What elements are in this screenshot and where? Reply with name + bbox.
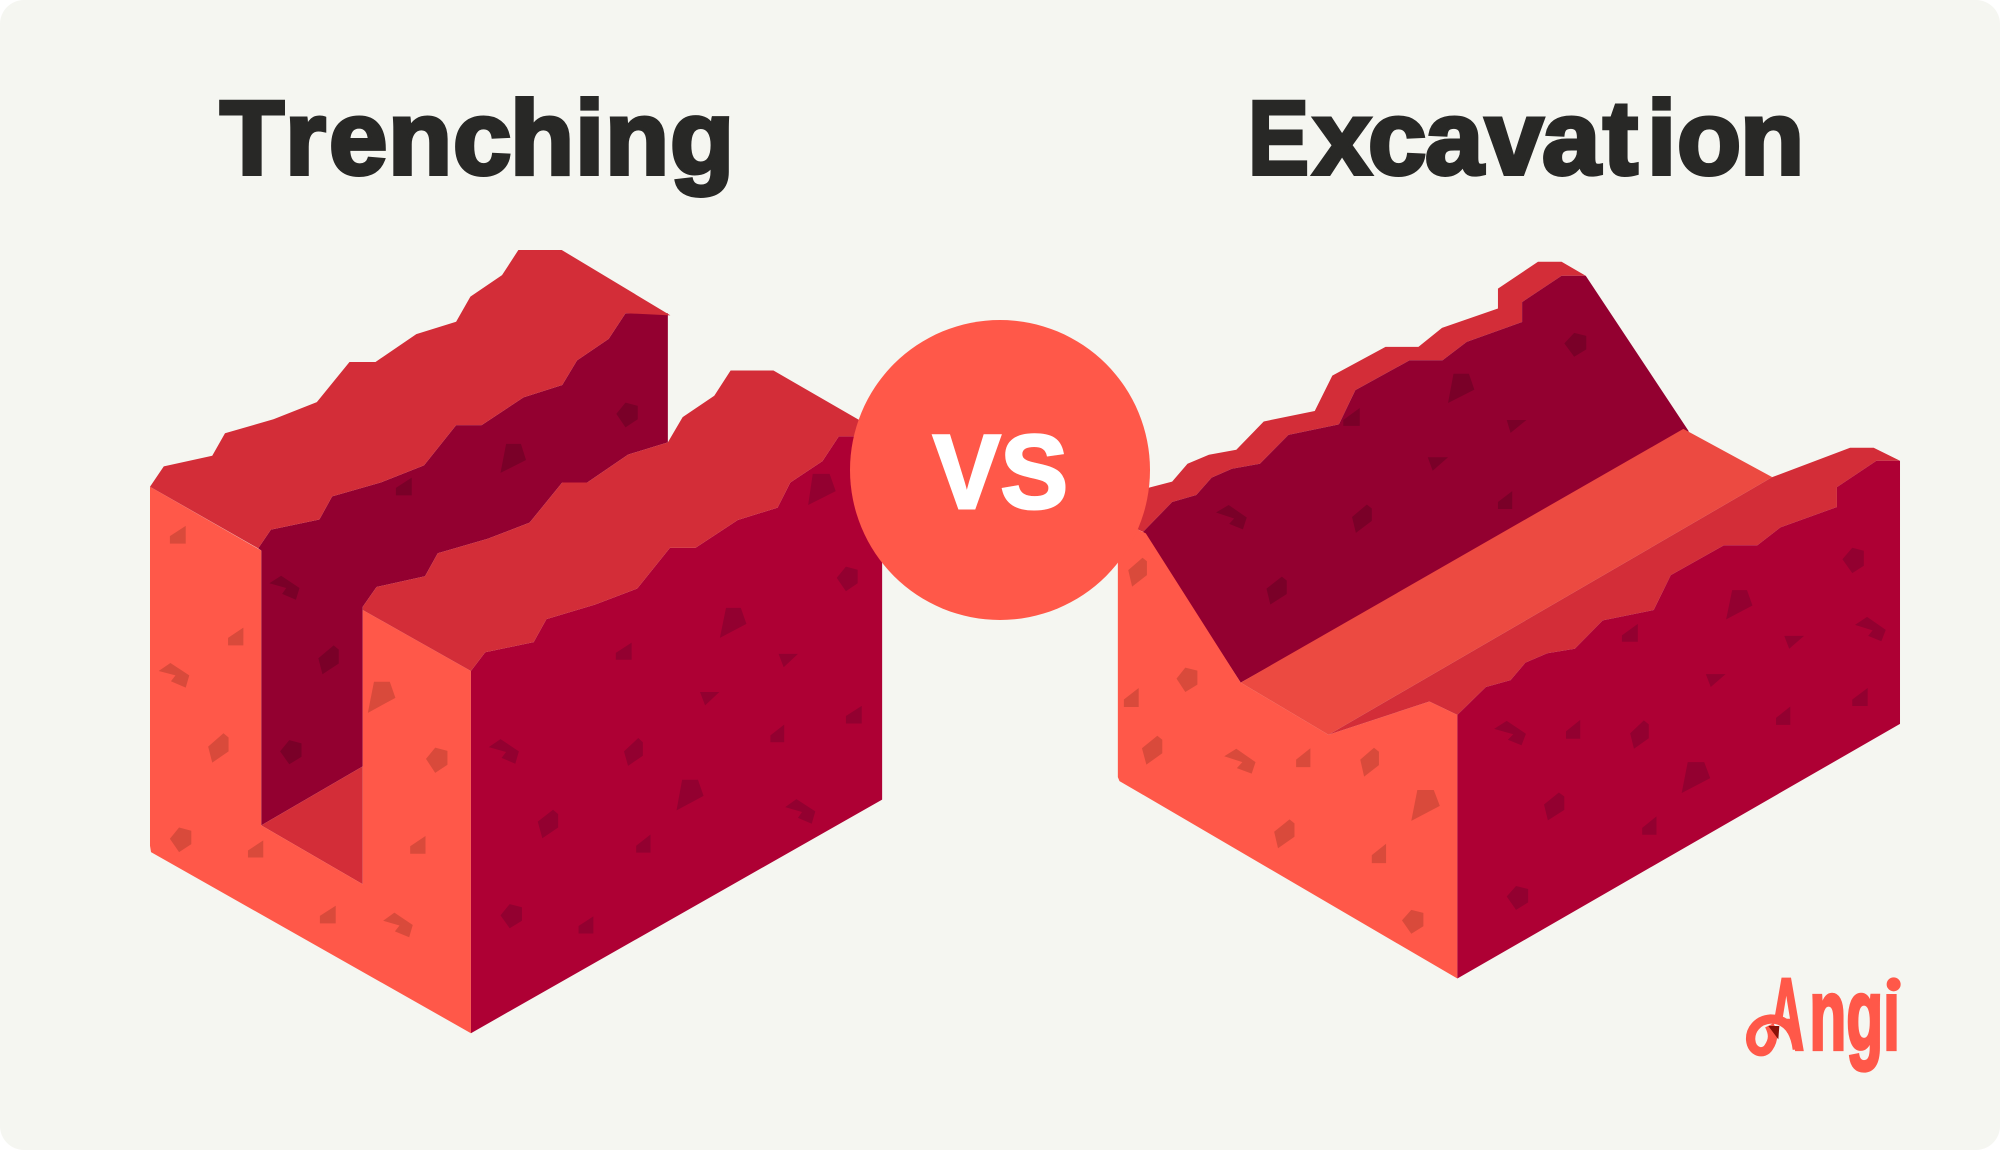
title: Trenching: Trenching xyxy=(220,80,734,197)
front face xyxy=(1118,518,1457,979)
stones on front face xyxy=(159,526,447,937)
logo wordmark: A xyxy=(1769,956,1804,1071)
right slope surface xyxy=(1328,448,1900,735)
trench back wall xyxy=(258,313,668,825)
i dot mask xyxy=(1884,973,1903,994)
stones on side face xyxy=(489,474,862,934)
logo loop xyxy=(1751,1019,1797,1052)
illustration: excavation block xyxy=(1118,262,1900,979)
stones on front face xyxy=(1124,558,1440,934)
trench floor xyxy=(261,766,363,884)
left wall top surface xyxy=(150,250,670,548)
excavated slope wall xyxy=(1143,276,1689,683)
stones on slope wall xyxy=(1216,333,1586,604)
right wall top surface xyxy=(363,371,882,671)
excavation floor xyxy=(1241,429,1772,735)
stones on side face xyxy=(1494,548,1886,910)
logo wordmark: ngi xyxy=(1809,956,1900,1071)
VS label: VS xyxy=(933,414,1068,531)
Angi logo xyxy=(1751,956,1903,1071)
back rim lip xyxy=(1118,262,1586,532)
title: Excavation: xcavation xyxy=(1313,80,1804,197)
badge circle xyxy=(850,320,1150,620)
front face xyxy=(150,487,471,1033)
i dot xyxy=(1887,977,1901,991)
illustration: trench block xyxy=(150,250,882,1033)
title: Excavation: E xyxy=(1248,80,1309,197)
stones on trench wall xyxy=(269,403,638,764)
VS badge xyxy=(850,320,1150,620)
A left leg mask xyxy=(1762,1017,1791,1053)
right side face xyxy=(1457,461,1900,979)
logo fold accent xyxy=(1768,1026,1779,1039)
right side face xyxy=(471,436,882,1033)
